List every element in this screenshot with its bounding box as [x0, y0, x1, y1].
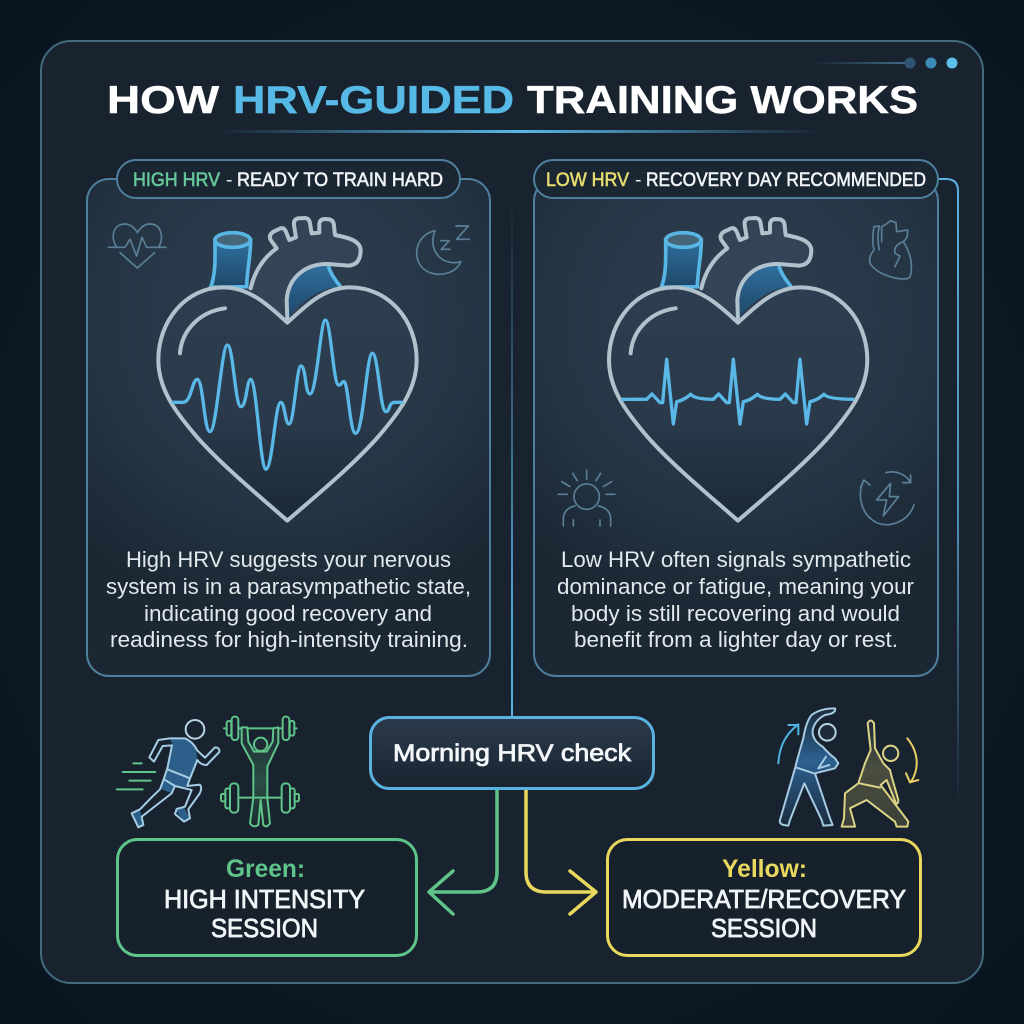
yellow outcome box: MODERATE/RECOVERY — [622, 884, 906, 914]
heading pill: low HRV — [534, 160, 938, 198]
icon: side stretch — [778, 708, 838, 826]
yellow outcome box — [608, 840, 920, 956]
heading pill: low HRV: LOW HRV — [546, 169, 629, 191]
icon: person with sun — [558, 470, 615, 526]
icon: energy cycle — [860, 472, 914, 525]
arrow: to green — [429, 789, 497, 914]
heading pill: low HRV: RECOVERY DAY RECOMMENDED — [646, 169, 926, 191]
description: high HRV: system is in a parasympathetic state, — [106, 574, 471, 599]
heading pill: high HRV: HIGH HRV — [133, 169, 220, 191]
heading pill: low HRV: - — [635, 169, 642, 191]
heart illustration: high HRV — [158, 218, 417, 521]
icon: runner — [117, 720, 219, 827]
description: low HRV: dominance or fatigue, meaning your — [557, 574, 914, 599]
description: low HRV: benefit from a lighter day or rest. — [574, 627, 898, 652]
description: low HRV — [557, 547, 914, 652]
arrow: to yellow — [526, 789, 596, 914]
title — [107, 79, 918, 122]
icon: weightlifter — [221, 717, 299, 826]
heading pill: high HRV: - — [226, 169, 232, 191]
title: HRV-GUIDED — [233, 79, 514, 122]
panel: low HRV — [534, 160, 938, 676]
icon: lunge stretch — [842, 720, 918, 827]
green outcome box: HIGH INTENSITY — [164, 884, 365, 914]
description: high HRV: High HRV suggests your nervous — [126, 547, 451, 572]
title: TRAINING WORKS — [527, 79, 918, 122]
description: high HRV — [106, 547, 471, 652]
heading pill: high HRV: READY TO TRAIN HARD — [237, 169, 443, 191]
yellow outcome box: Yellow: — [722, 855, 807, 883]
heart illustration: low HRV — [609, 218, 867, 521]
icon: anatomical heart — [870, 221, 911, 279]
morning HRV check box: Morning HRV check — [393, 740, 632, 767]
connector: right side line — [938, 179, 958, 810]
icon: heart with pulse — [108, 224, 166, 268]
green outcome box — [118, 840, 416, 956]
window dots — [810, 58, 958, 68]
description: high HRV: indicating good recovery and — [144, 601, 432, 626]
green outcome box: SESSION — [211, 913, 318, 943]
morning HRV check box — [370, 718, 654, 788]
green outcome box: Green: — [226, 855, 305, 883]
description: high HRV: readiness for high-intensity training. — [110, 627, 468, 652]
description: low HRV: body is still recovering and would — [571, 601, 900, 626]
panel: high HRV — [87, 160, 490, 676]
description: low HRV: Low HRV often signals sympathetic — [561, 547, 911, 572]
icon: moon and zzz — [417, 226, 469, 274]
title: HOW — [107, 79, 219, 122]
heading pill: high HRV — [117, 160, 460, 198]
connector: center vertical line — [511, 195, 513, 717]
title underline — [215, 130, 822, 133]
yellow outcome box: SESSION — [711, 913, 817, 943]
